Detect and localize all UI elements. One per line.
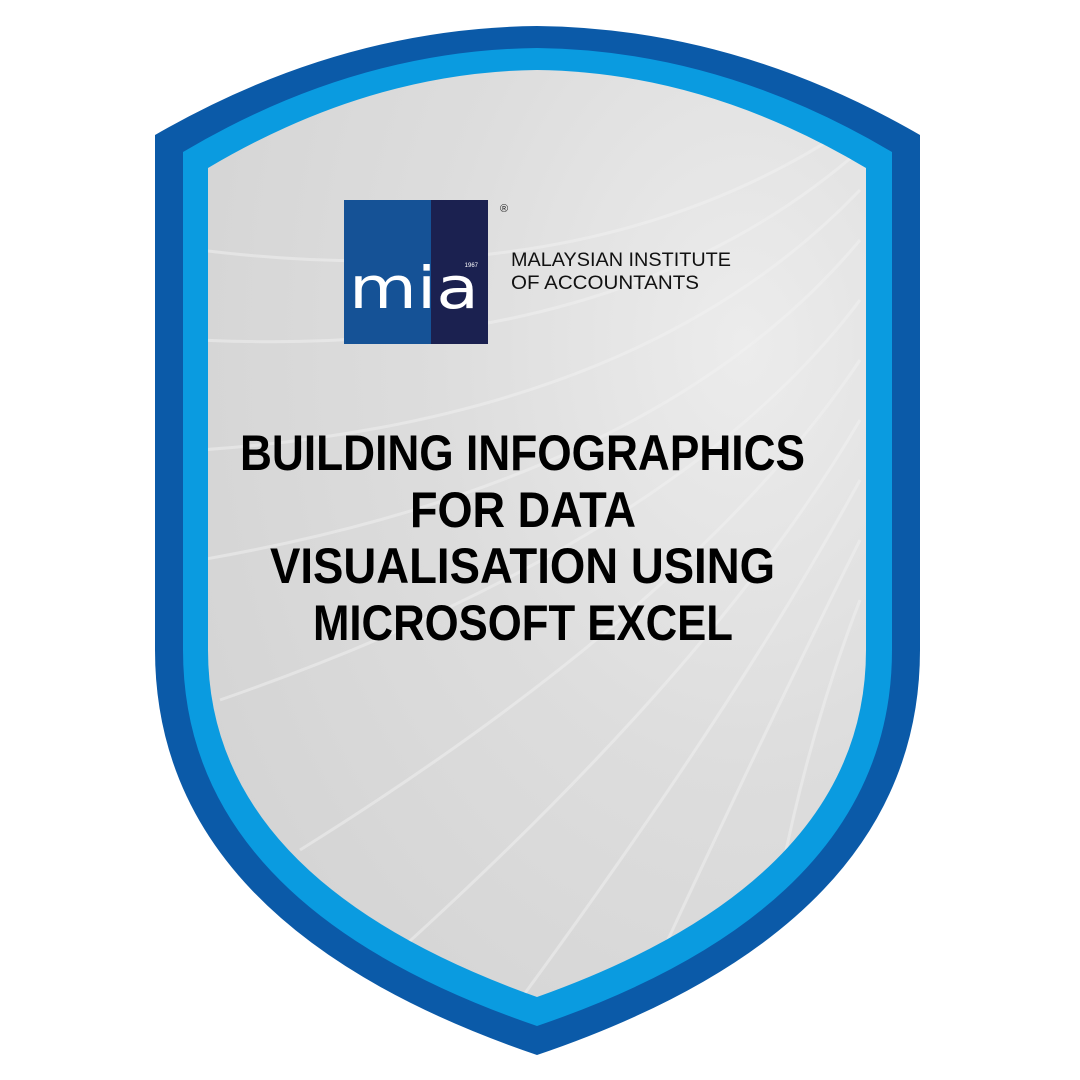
- title: FOR DATA: [410, 482, 636, 538]
- shield light blue band: [183, 48, 892, 1026]
- logo: MIA: 1967: [465, 263, 479, 269]
- logo: MIA: [344, 200, 731, 344]
- logo: MIA: MALAYSIAN INSTITUTE: [511, 250, 731, 271]
- title: VISUALISATION USING: [270, 538, 775, 594]
- shield gray interior: [200, 60, 880, 1010]
- badge: shield: [155, 26, 920, 1055]
- logo: MIA: ®: [500, 203, 508, 215]
- shield outer dark blue: [155, 26, 920, 1055]
- logo: MIA: OF ACCOUNTANTS: [511, 273, 699, 294]
- logo: MIA: mia: [349, 254, 479, 322]
- title: [240, 425, 805, 651]
- title: MICROSOFT EXCEL: [313, 595, 733, 651]
- title: BUILDING INFOGRAPHICS: [240, 425, 805, 481]
